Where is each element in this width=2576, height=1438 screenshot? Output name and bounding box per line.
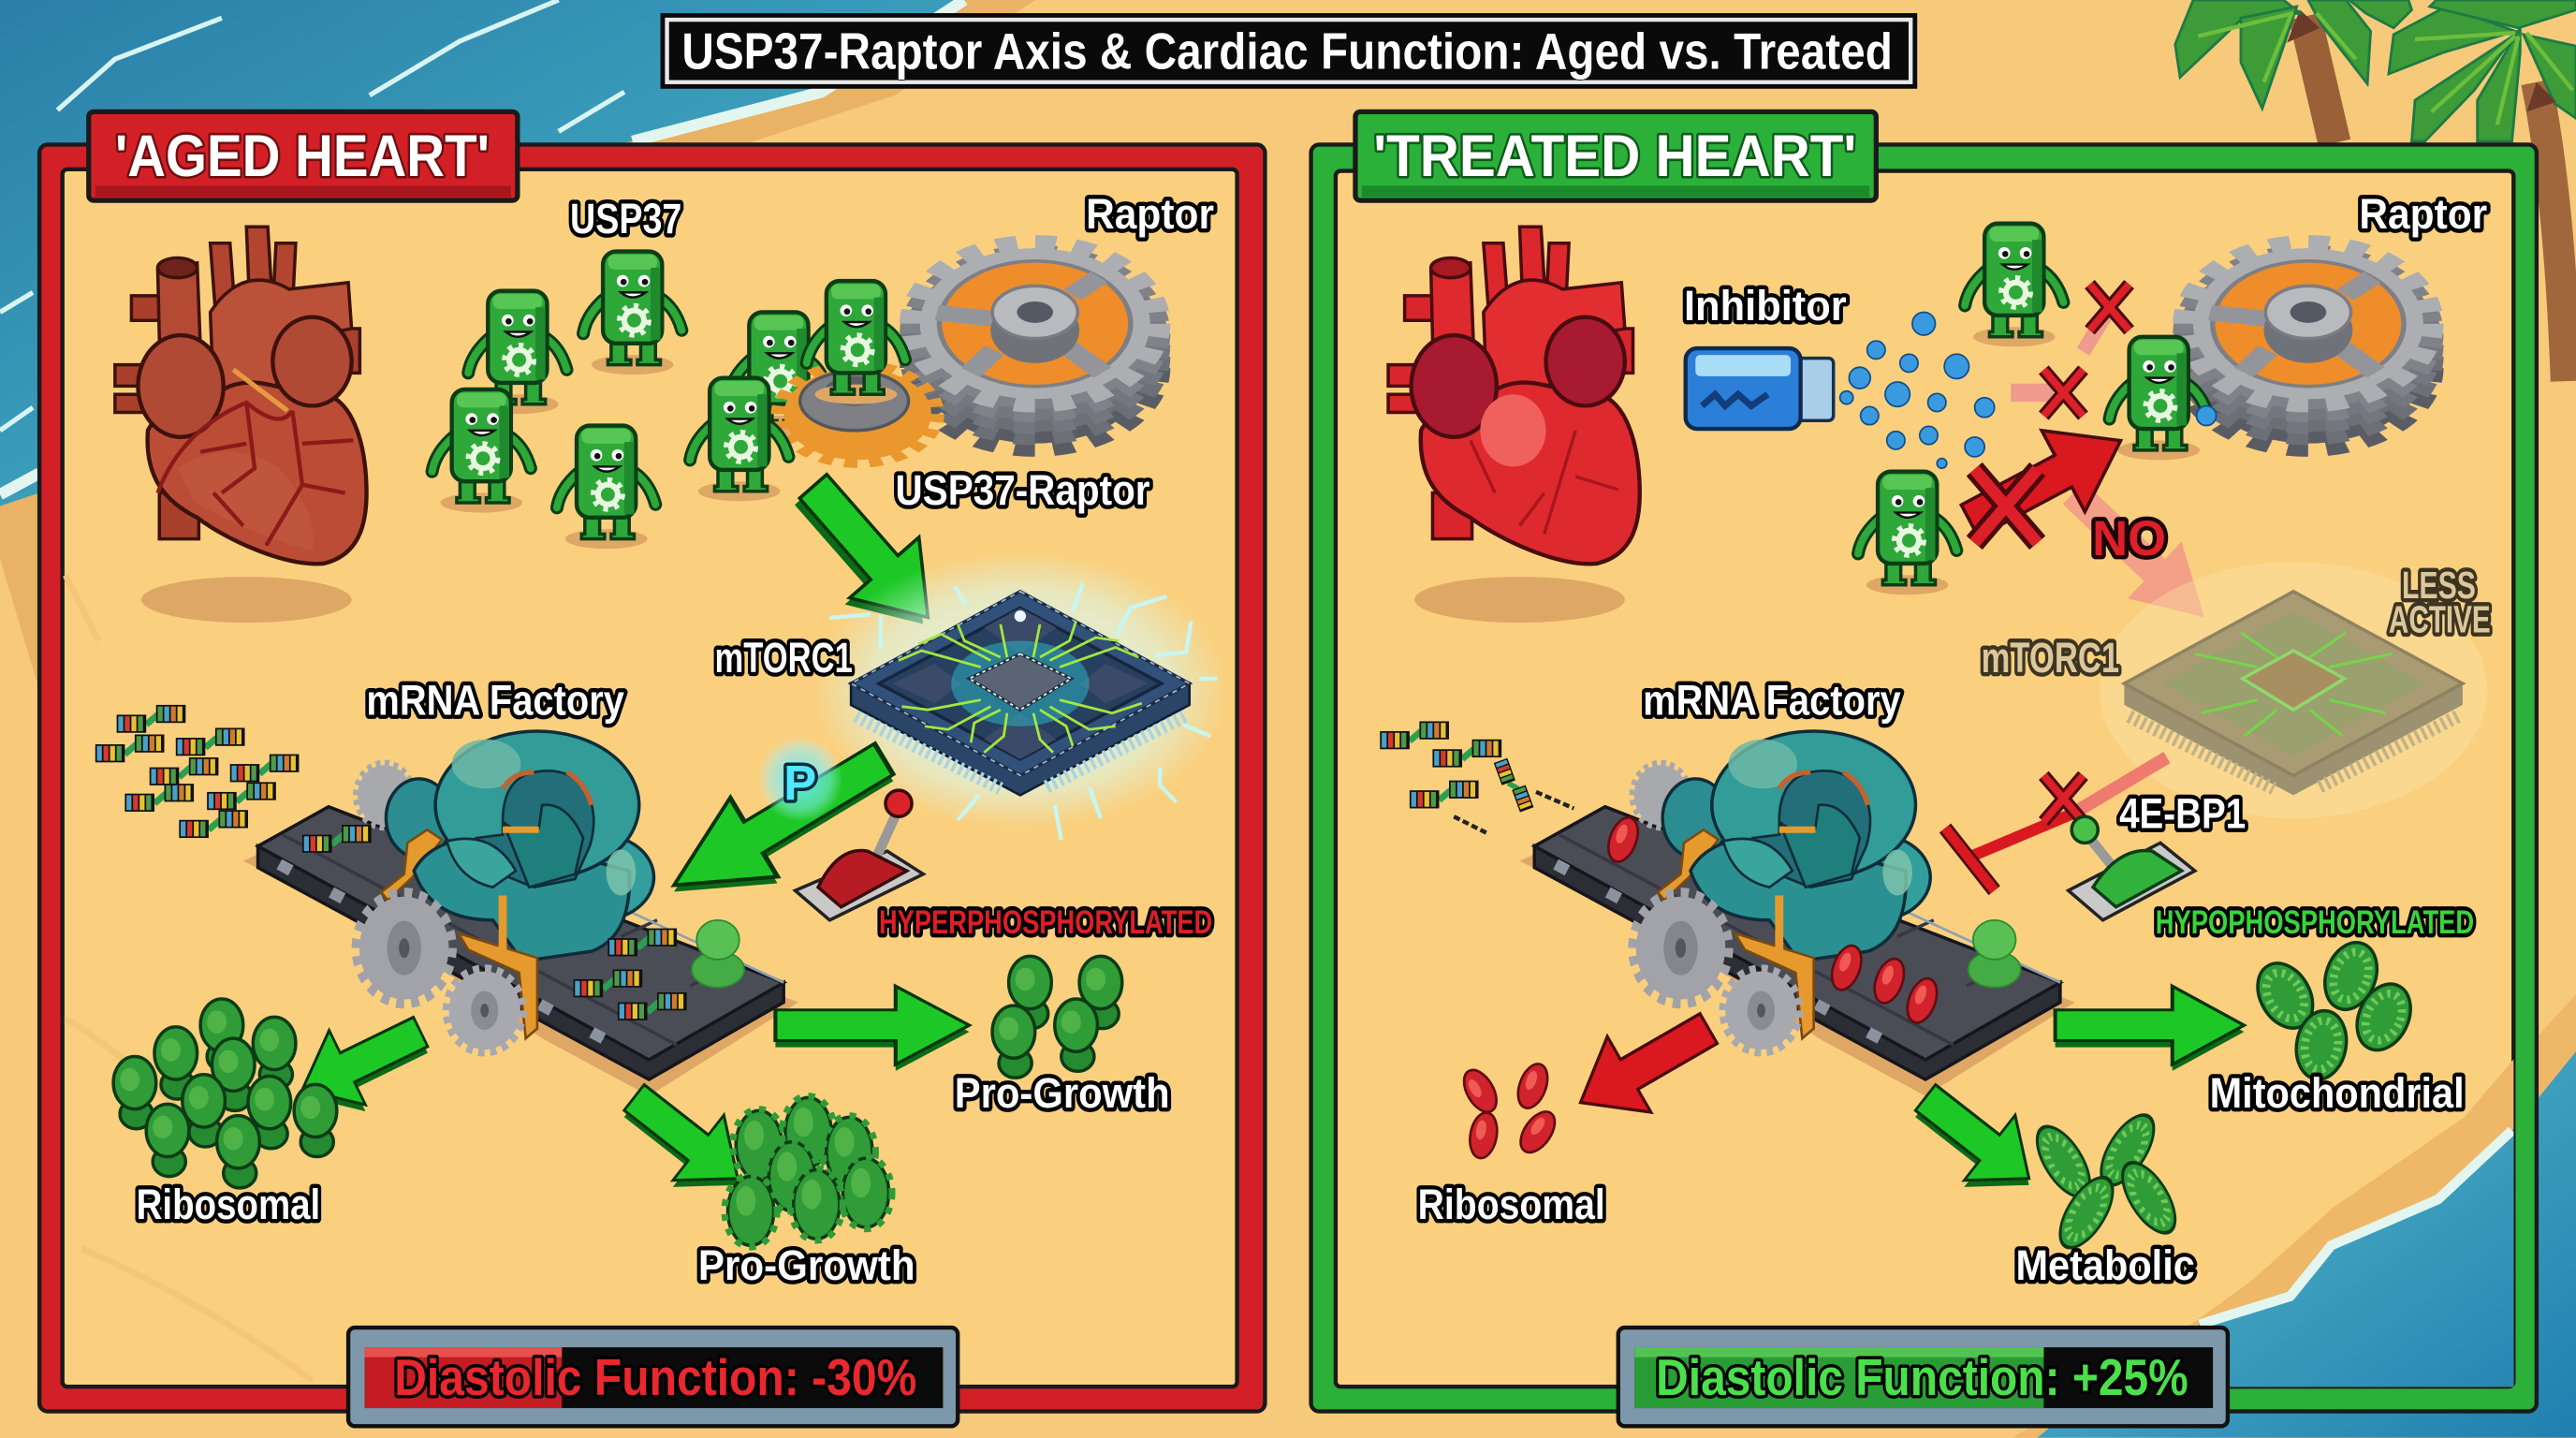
phosphate P: P <box>783 756 816 812</box>
mitochondrial proteins <box>2247 935 2421 1083</box>
arrow: to pro-growth right <box>775 986 970 1071</box>
label: less active <box>2389 564 2491 641</box>
USP37-Raptor complex <box>690 281 936 501</box>
USP37 proteins treated <box>1858 224 2217 594</box>
title text: USP37-Raptor Axis & Cardiac Function: Aged vs. Treated <box>681 23 1893 81</box>
label: 4E-BP1: 4E-BP1 <box>2119 790 2246 838</box>
icon: ribosome conveyor factory treated <box>1519 731 2075 1096</box>
heading tab treated: 'TREATED HEART' <box>1373 124 1856 189</box>
label: NO: NO <box>2092 511 2166 566</box>
mRNA strands <box>95 705 299 838</box>
icon: green lever <box>2069 816 2195 920</box>
title banner <box>661 13 1917 89</box>
label: USP37: USP37 <box>570 195 681 242</box>
heading tab aged <box>89 111 518 200</box>
label: mTORC1: mTORC1 <box>714 634 853 682</box>
ribosomal proteins cluster <box>113 999 337 1188</box>
label: Inhibitor: Inhibitor <box>1684 282 1847 330</box>
label: USP37-Raptor: USP37-Raptor <box>896 466 1150 514</box>
faded arrow to mTORC1 <box>2046 464 2232 646</box>
arrow: to mitochondrial <box>2056 986 2244 1071</box>
inhibition bar <box>1945 757 2167 890</box>
blocked red arrow <box>1948 400 2143 562</box>
label: mTORC1 faded: mTORC1 <box>1982 634 2119 682</box>
arrow: to ribosomal <box>285 994 439 1133</box>
icon: ribosome conveyor factory <box>243 731 798 1096</box>
label: Ribosomal: Ribosomal <box>137 1181 320 1228</box>
icon: treated heart <box>1388 227 1640 623</box>
panel: treated heart <box>1311 111 2576 1438</box>
label: mRNA Factory: mRNA Factory <box>366 676 624 724</box>
icon: aged heart <box>115 227 367 623</box>
background: sea bottom right <box>2012 994 2576 1438</box>
icon: raptor gear treated <box>2187 243 2430 448</box>
label: mRNA Factory treated: mRNA Factory <box>1643 676 1901 724</box>
icon: active mTORC1 chip <box>813 552 1227 840</box>
pro-growth proteins right cluster <box>992 956 1122 1078</box>
background: sea top left <box>0 0 1035 690</box>
icon: red lever <box>795 790 923 920</box>
icon: inhibitor vial <box>1686 348 1834 429</box>
arrow: to metabolic <box>1900 1065 2055 1218</box>
icon: raptor gear <box>914 243 1157 448</box>
arrow: complex to mTORC1 <box>774 456 962 654</box>
arrow: phosphorylation <box>651 720 908 932</box>
arrow: reduced ribosomal <box>1559 990 1731 1140</box>
label: HYPOPHOSPHORYLATED: HYPOPHOSPHORYLATED <box>2156 904 2474 941</box>
pro-growth proteins bottom cluster <box>724 1096 892 1247</box>
panel frame aged <box>39 144 1265 1412</box>
label: Pro-Growth right: Pro-Growth <box>955 1069 1170 1117</box>
status bar: diastolic function +25% <box>1618 1328 2228 1426</box>
label: less active: LESS <box>2402 564 2476 607</box>
blocked arrow upper <box>2083 285 2130 352</box>
reduced ribosomal proteins <box>1457 1060 1561 1160</box>
panel: aged heart <box>39 111 1265 1426</box>
panel frame treated <box>1311 144 2576 1438</box>
label: Pro-Growth bottom: Pro-Growth <box>698 1241 915 1289</box>
label: less active: ACTIVE <box>2389 598 2491 641</box>
metabolic proteins <box>2027 1107 2186 1256</box>
icon: less active mTORC1 chip <box>2100 562 2487 818</box>
label: Metabolic: Metabolic <box>2016 1241 2195 1289</box>
label: HYPERPHOSPHORYLATED: HYPERPHOSPHORYLATED <box>879 904 1212 941</box>
inhibitor droplets <box>1840 312 1995 468</box>
label: Raptor treated: Raptor <box>2359 190 2487 238</box>
arrow: to pro-growth bottom <box>608 1065 763 1218</box>
label: Mitochondrial: Mitochondrial <box>2210 1069 2465 1117</box>
heading tab aged: 'AGED HEART' <box>115 124 490 189</box>
label: Raptor: Raptor <box>1086 190 1214 238</box>
status bar: diastolic function -30% <box>348 1328 958 1426</box>
USP37 free proteins <box>432 252 681 549</box>
palm trees <box>2175 0 2576 381</box>
heading tab treated <box>1355 111 1876 200</box>
status bar: diastolic function -30%: Diastolic Function: -30% <box>394 1349 916 1406</box>
blocked arrow middle <box>2011 370 2083 416</box>
label: Ribosomal treated: Ribosomal <box>1418 1181 1605 1228</box>
status bar: diastolic function +25%: Diastolic Function: +25% <box>1656 1349 2188 1406</box>
mRNA strands treated <box>1380 721 1573 833</box>
